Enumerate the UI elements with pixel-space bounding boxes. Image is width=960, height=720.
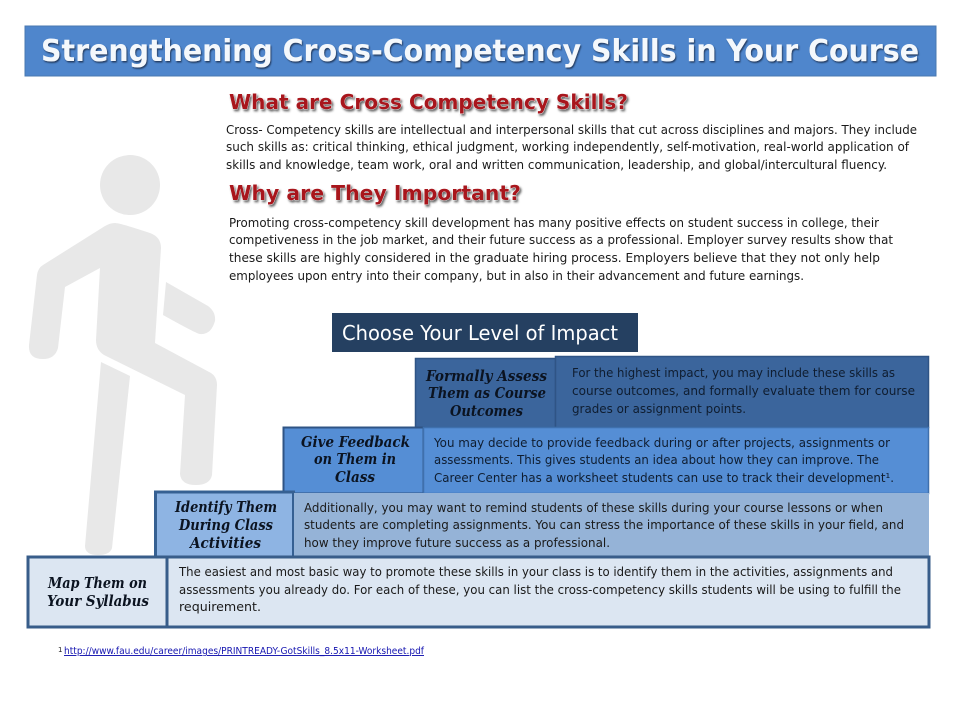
description: give feedback: assessments. This gives students an idea about how they can improve. The	[434, 452, 879, 467]
label: identify them: Identify Them	[174, 499, 277, 516]
footnote link: http://www.fau.edu/career/images/PRINTREADY-GotSkills_8.5x11-Worksheet.pdf	[64, 646, 425, 657]
description: formally assess: grades or assignment points.	[572, 401, 746, 416]
description: identify them: Additionally, you may want to remind students of these skills during your course lessons or when	[304, 500, 883, 515]
description: give feedback	[424, 428, 928, 494]
heading: choose your level of impact: Choose Your Level of Impact	[342, 321, 618, 345]
description: map them	[167, 557, 929, 627]
text block: importance: these skills are highly considered in the graduate hiring process. Employers believe that they not only help	[229, 250, 880, 265]
label: identify them: Activities	[188, 535, 261, 552]
panel: level 2 identify them	[156, 492, 929, 557]
description: map them: assessments you already do. For each of these, you can list the cross-competency skills students will be using to fulfill the	[179, 582, 901, 597]
panel: level 3 give feedback	[284, 428, 928, 494]
text block: importance: employees upon entry into their company, but in also in their advancement and future earnings.	[229, 268, 804, 283]
label: formally assess: Them as Course	[428, 385, 546, 402]
description: map them: requirement.	[179, 599, 261, 614]
text block: importance: Promoting cross-competency skill development has many positive effects on student success in college, their	[229, 215, 880, 230]
description: identify them: students are completing assignments. You can stress the importance of these skills in your field, and	[304, 517, 904, 532]
text block: importance	[229, 215, 893, 283]
label: give feedback: on Them in	[314, 451, 396, 468]
label: give feedback: Class	[335, 469, 375, 486]
label: map them: Map Them on	[47, 575, 147, 592]
description: formally assess: course outcomes, and formally evaluate them for course	[572, 383, 915, 398]
description: give feedback: Career Center has a worksheet students can use to track their development¹.	[434, 470, 894, 485]
label: map them: Your Syllabus	[47, 593, 149, 610]
panel: level 4 formally assess	[416, 356, 928, 428]
title banner	[25, 26, 936, 76]
description: formally assess	[556, 356, 928, 428]
panel: level 1 map them	[28, 557, 929, 627]
label: formally assess: Formally Assess	[425, 368, 547, 385]
text block: definition: Cross- Competency skills are intellectual and interpersonal skills that cut across disciplines and majors. They include	[226, 122, 917, 137]
description: map them: The easiest and most basic way to promote these skills in your class is to identify them in the activities, assignments and	[178, 564, 893, 579]
text block: definition: such skills as: critical thinking, ethical judgment, working independently, self-motivation, real-world application of	[226, 139, 910, 154]
description: identify them: how they improve future success as a professional.	[304, 535, 610, 550]
title banner: Strengthening Cross-Competency Skills in Your Course	[41, 34, 919, 69]
heading: what are cross competency skills: What are Cross Competency Skills?	[229, 90, 628, 114]
label: identify them: During Class	[178, 517, 273, 534]
text block: definition	[226, 122, 917, 172]
label: map them	[28, 557, 167, 627]
description: identify them	[294, 493, 929, 556]
footnote link: 1	[58, 646, 62, 654]
label: give feedback: Give Feedback	[301, 434, 410, 451]
label: identify them	[156, 492, 294, 557]
text block: definition: skills and knowledge, team work, oral and written communication, leadership, and global/intercultural fluency.	[226, 157, 887, 172]
label: formally assess	[416, 358, 556, 428]
label: formally assess: Outcomes	[450, 403, 523, 420]
heading: choose your level of impact	[332, 313, 638, 352]
description: give feedback: You may decide to provide feedback during or after projects, assignments or	[433, 435, 891, 450]
heading: why are they important: Why are They Important?	[229, 181, 521, 205]
description: formally assess: For the highest impact, you may include these skills as	[572, 365, 895, 380]
icon: walking person stepping up	[29, 155, 217, 555]
label: give feedback	[284, 428, 424, 494]
text block: importance: competiveness in the job market, and their future success as a professional. Employer survey results show that	[229, 232, 893, 247]
